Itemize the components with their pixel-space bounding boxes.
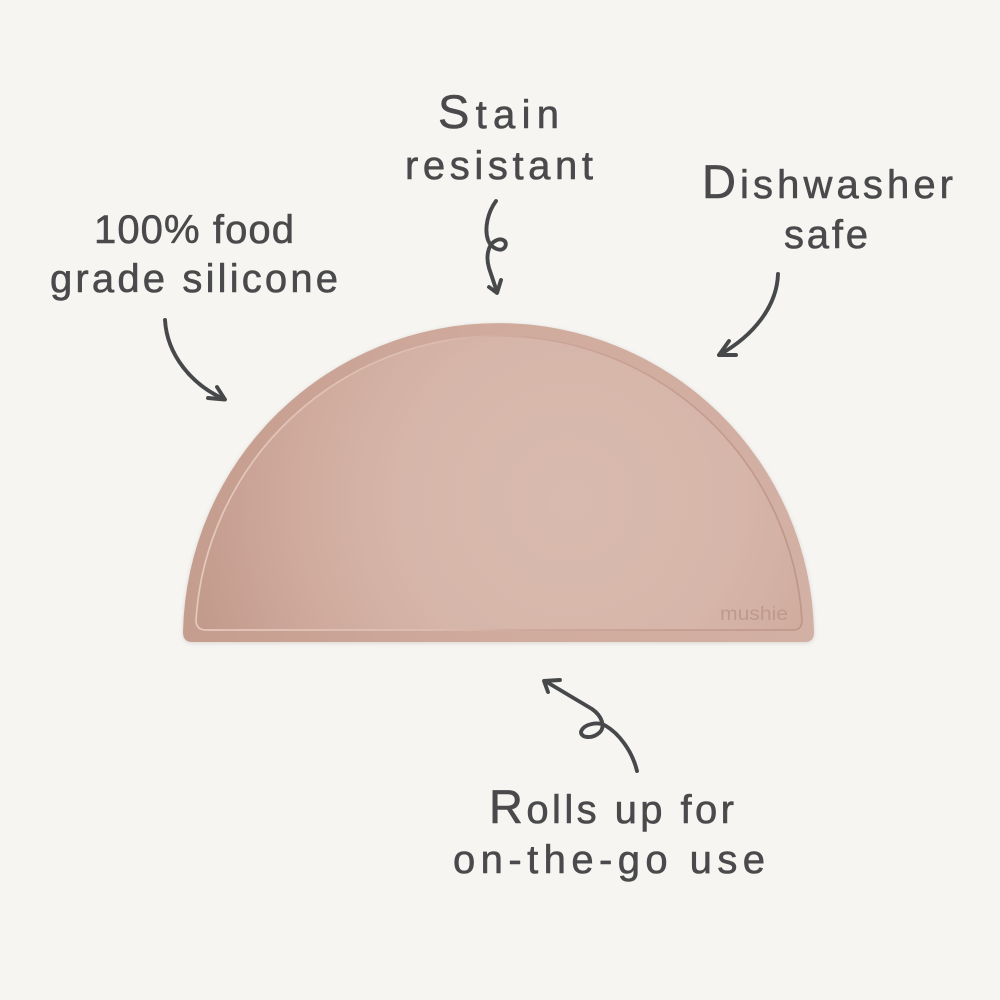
arrow: rolls up to mat [544,680,637,771]
label: food grade silicone [50,208,338,301]
inner raised rim [196,336,802,630]
arrow: stain resistant to mat [486,201,506,293]
placemat [183,323,814,643]
label: rolls up [453,780,765,882]
label: rolls up: on-the-go use [453,838,765,882]
label: stain resistant [405,85,593,188]
arrow: dishwasher safe to mat [719,274,778,355]
label: stain resistant: Stain [438,85,559,138]
label: food grade silicone: 100% food [94,208,294,252]
brand mark: mushie [720,604,788,625]
label: food grade silicone: grade silicone [50,257,338,301]
label: dishwasher safe: safe [784,213,868,257]
label: rolls up: Rolls up for [489,780,734,833]
label: dishwasher safe [702,155,953,257]
arrow: food grade to mat [165,320,225,400]
label: dishwasher safe: Dishwasher [702,155,953,208]
label: stain resistant: resistant [405,144,593,188]
